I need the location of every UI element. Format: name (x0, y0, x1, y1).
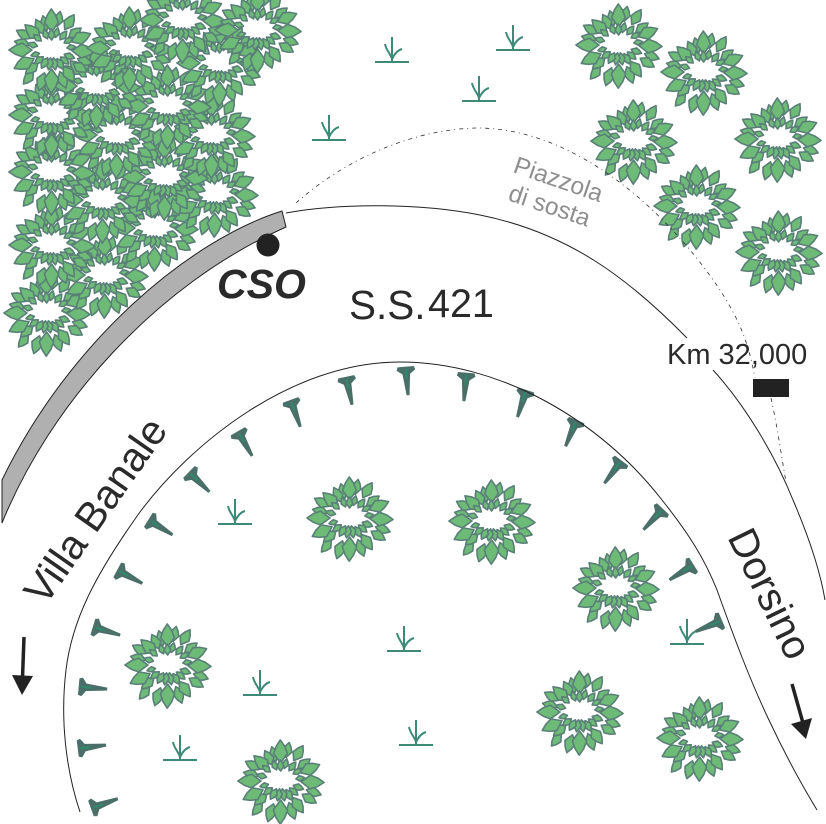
road lower edge (64, 362, 817, 812)
di sosta: di sosta (505, 180, 594, 233)
road name S.S.421: 421 (428, 282, 494, 326)
road upper edge (286, 206, 825, 600)
rest area dashed outline (296, 128, 786, 482)
grey guardrail strip (2, 211, 286, 523)
kilometre marker bar (753, 379, 789, 397)
grass tufts (163, 25, 704, 760)
Villa Banale label: Villa Banale (15, 409, 176, 612)
rest area label (505, 152, 607, 233)
arrow head toward Villa Banale (12, 675, 33, 695)
kilometre label: Km 32,000 (667, 339, 807, 371)
CSO marker dot (256, 234, 280, 256)
guardrail posts row (77, 366, 725, 817)
forest cluster, top left (4, 0, 301, 356)
arrow toward Villa Banale (22, 637, 24, 678)
Piazzola: Piazzola (510, 152, 607, 208)
arrow head toward Dorsino (791, 718, 812, 739)
trees, top right (576, 4, 822, 295)
CSO label: CSO (217, 261, 306, 307)
trees, lower area (125, 477, 743, 824)
road name S.S.421: S.S. (349, 282, 426, 328)
Dorsino label: Dorsino (719, 521, 821, 666)
arrow toward Dorsino (792, 684, 803, 723)
